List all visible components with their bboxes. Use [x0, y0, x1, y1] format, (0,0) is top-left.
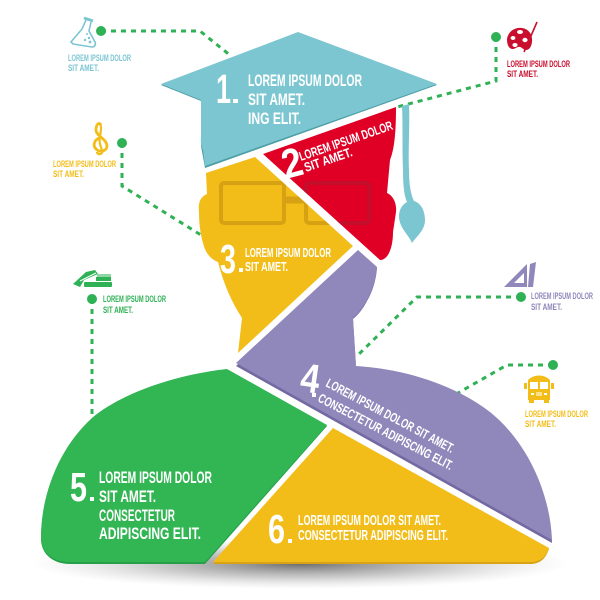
clef text: [53, 159, 116, 180]
connector lines: [92, 31, 553, 418]
period 1: [233, 99, 238, 103]
callout: treble clef: [53, 123, 116, 180]
numeral 6: 6: [268, 506, 285, 552]
icon: books: [73, 270, 112, 287]
text 4: LOREM IPSUM DOLOR SIT AMET.: [324, 375, 457, 456]
callout: bus: [524, 376, 588, 430]
tassel: [399, 104, 425, 243]
text 5: ADIPISCING ELIT.: [99, 525, 201, 543]
books text: LOREM IPSUM DOLOR: [103, 294, 166, 305]
text 6: CONSECTETUR ADIPISCING ELIT.: [298, 528, 448, 544]
text 2: [297, 118, 395, 175]
text 1: ING ELIT.: [248, 110, 301, 128]
books text: SIT AMET.: [103, 305, 133, 316]
panel 3: yellow face: [199, 157, 369, 353]
connector dots: [87, 26, 558, 370]
numeral 3: 3: [220, 236, 236, 282]
flask text: LOREM IPSUM DOLOR: [68, 53, 131, 64]
bus text: SIT AMET.: [525, 419, 556, 430]
callout: set square: [504, 262, 593, 313]
text 1: [248, 72, 362, 128]
text 5: [99, 469, 212, 543]
clef text: LOREM IPSUM DOLOR: [53, 159, 116, 170]
text 3: [245, 246, 331, 274]
period 5: [90, 497, 94, 501]
panel 1: mortarboard cap: [161, 32, 437, 168]
icon: palette: [507, 22, 537, 52]
callout: palette: [507, 22, 570, 80]
callout: books: [73, 270, 166, 316]
panel 4: purple neck and shoulder: [236, 250, 552, 543]
glasses right part: [306, 183, 369, 223]
numeral 4: 4: [298, 354, 323, 403]
text 4: CONSECTETUR ADIPISCING ELIT.: [316, 390, 456, 473]
glasses left part: [219, 181, 330, 225]
text 2: SIT AMET.: [302, 144, 354, 175]
numeral 1: 1: [216, 66, 231, 112]
panel 2: red face: [263, 107, 396, 260]
ground shadow: [30, 539, 570, 589]
text 6: LOREM IPSUM DOLOR SIT AMET.: [298, 513, 441, 529]
flask text: SIT AMET.: [68, 63, 99, 74]
icon: flask: [71, 18, 95, 47]
text 2: LOREM IPSUM DOLOR: [297, 118, 395, 164]
books text: [103, 294, 166, 316]
panel 6: yellow lower torso: [213, 428, 549, 564]
set square text: [531, 291, 593, 313]
icon: set square and ruler: [504, 262, 536, 287]
panel 5: green shoulder: [41, 369, 327, 564]
period 4: [312, 393, 316, 397]
text 5: LOREM IPSUM DOLOR: [99, 469, 212, 487]
text 4: [316, 375, 457, 473]
text 1: SIT AMET.: [248, 91, 305, 109]
bus text: [525, 409, 588, 430]
palette text: [507, 59, 570, 80]
set square text: SIT AMET.: [531, 302, 562, 313]
numeral 5: 5: [70, 464, 87, 510]
period 6: [288, 539, 292, 543]
text 6: [298, 513, 448, 544]
text 1: LOREM IPSUM DOLOR: [248, 72, 362, 90]
period 3: [239, 268, 243, 272]
text 5: SIT AMET.: [99, 488, 156, 506]
icon: treble clef: [94, 123, 107, 154]
text 3: SIT AMET.: [245, 260, 288, 274]
flask text: [68, 53, 131, 74]
clef text: SIT AMET.: [53, 169, 84, 180]
numeral 2: 2: [276, 138, 308, 188]
callout: flask: [68, 18, 131, 74]
text 3: LOREM IPSUM DOLOR: [245, 246, 331, 260]
icon: school bus: [524, 376, 554, 403]
text 5: CONSECTETUR: [99, 507, 175, 525]
palette text: SIT AMET.: [507, 69, 538, 80]
